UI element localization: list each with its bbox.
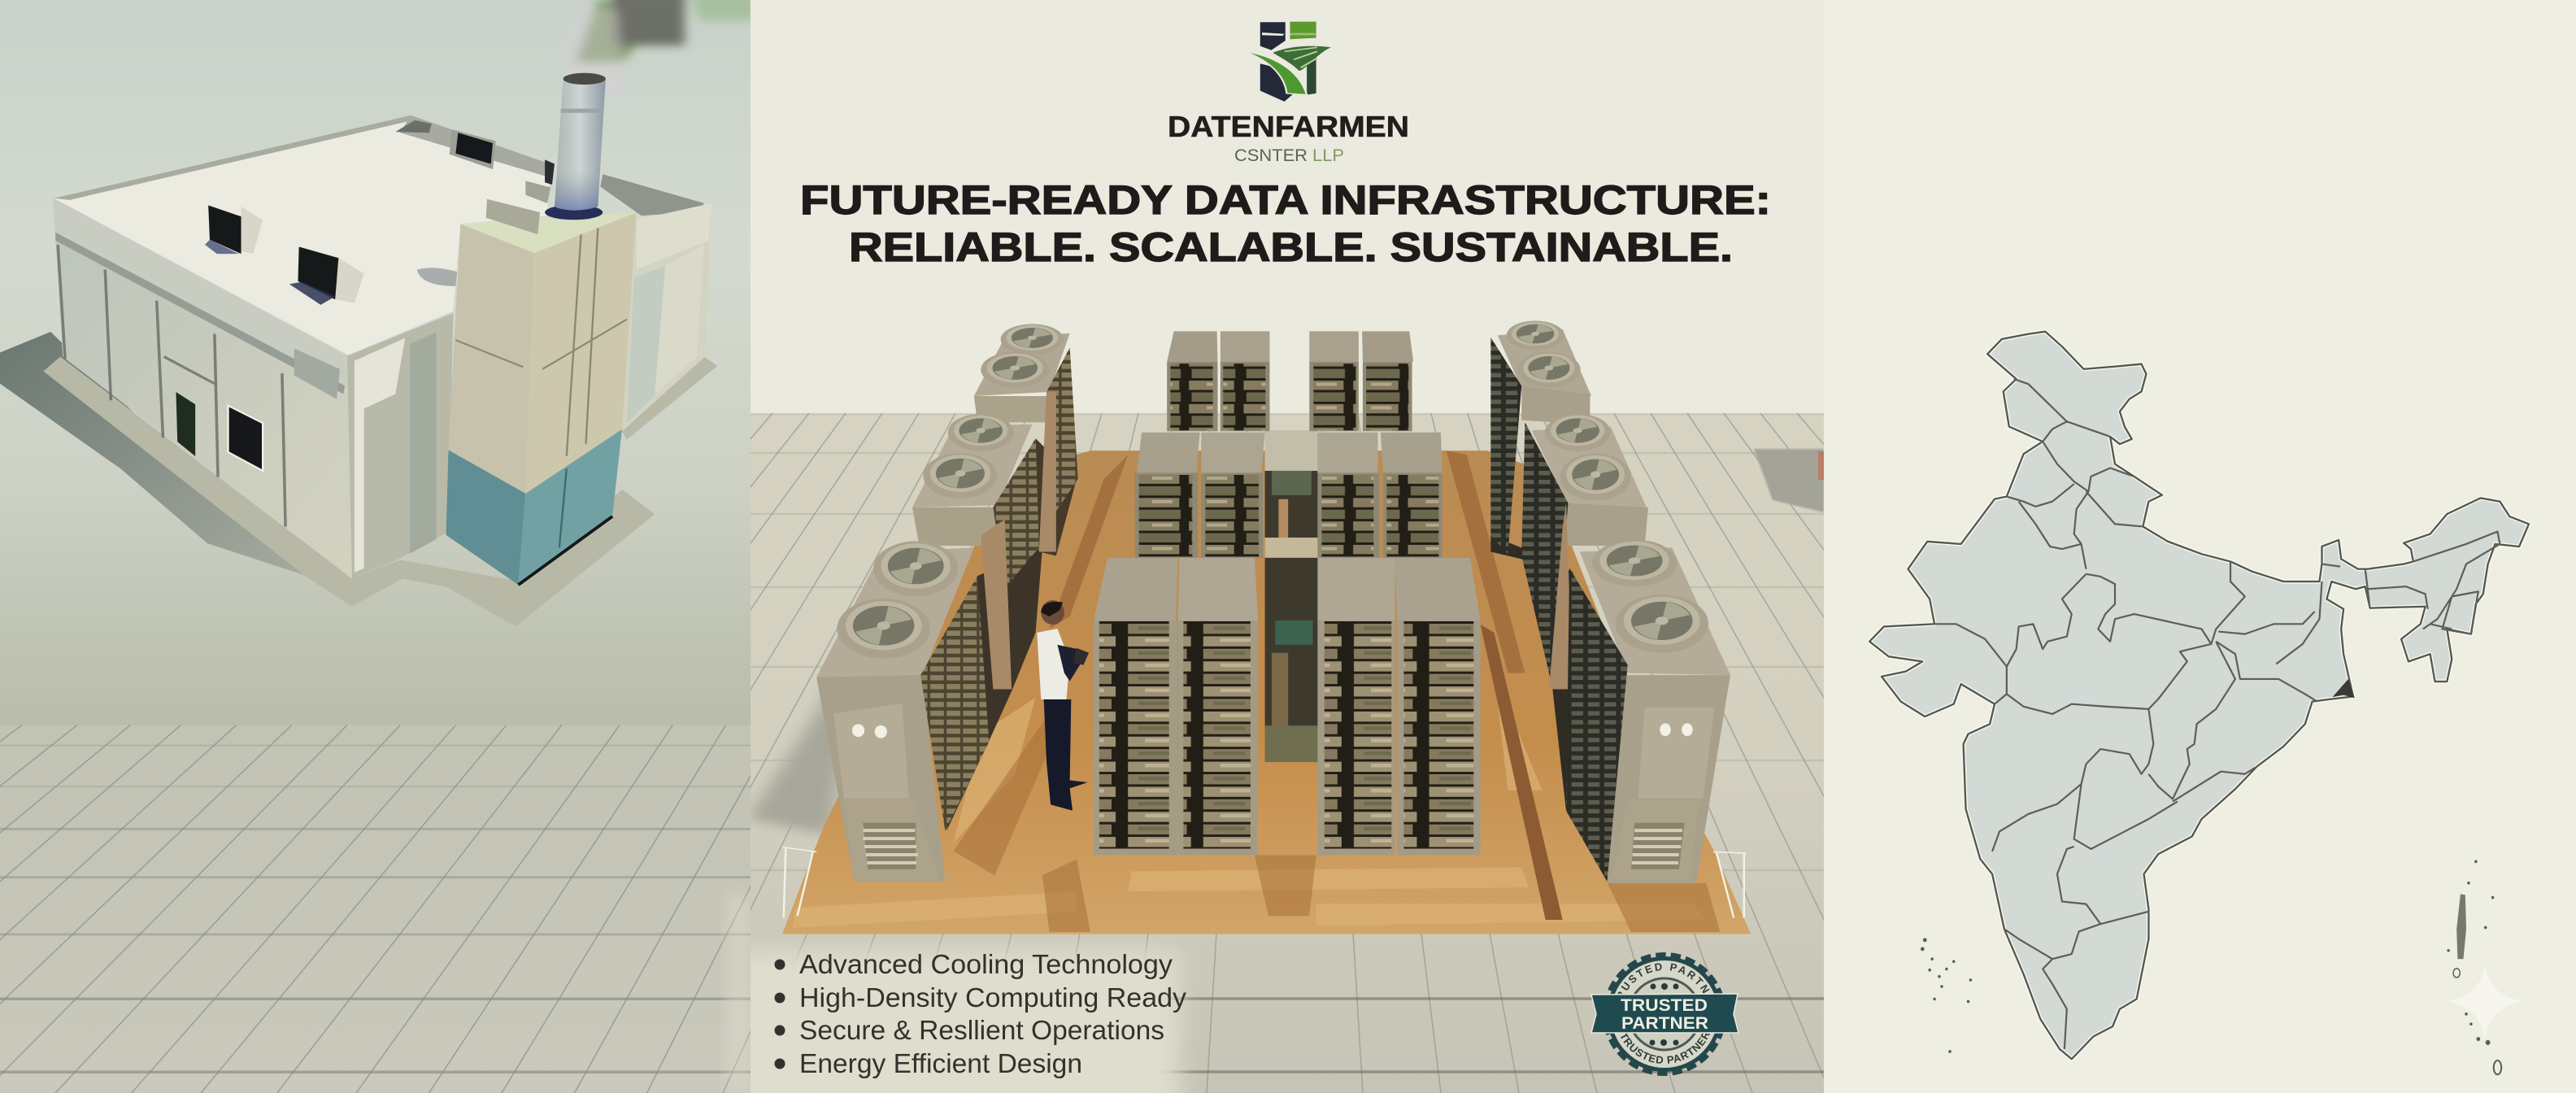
cooling units: right front [1566,540,1730,883]
cooling units: right middle [1521,414,1648,690]
panel: India map [1824,0,2576,1093]
map of India with state borders [1869,332,2529,1074]
Andaman and Nicobar islands [2447,860,2501,1074]
vent on facade [294,348,340,399]
wall: front right facade [347,313,453,578]
building with chimney [0,0,756,626]
Lakshadweep islands [1921,938,1972,1053]
cooling units: left front [816,542,989,882]
wall: right facade [626,215,711,426]
bullet backdrop glow [732,951,1179,1093]
shadow patch on floor [1754,449,1824,512]
tiled floor: left panel [0,725,751,1093]
rooftop unit 1 [205,205,263,254]
chimney [545,73,606,220]
panel: center data farm [751,21,1824,1093]
shadow on floor left [751,693,838,837]
roof [54,115,550,355]
dark gaps between cooling units [946,438,1573,831]
tiled floor: center panel [751,413,1824,1093]
white corner posts [782,847,1746,918]
tower: side faces [446,212,637,585]
cooling units: right back [1490,320,1591,554]
bullet 1: Advanced Cooling Technology [799,949,1173,979]
title line 1: FUTURE-READY DATA INFRASTRUCTURE: [800,177,1771,223]
logo mark [1245,22,1331,102]
cooling units: left middle [912,414,1039,690]
bullet 2: High-Density Computing Ready [799,982,1187,1012]
rooftop unit 2 [289,246,364,305]
ground shadow [0,332,309,577]
bullet 4: Energy Efficient Design [799,1048,1082,1078]
logo wordmark: DATENFARMEN [1168,110,1409,143]
rooftop vents by tower [486,159,555,234]
trusted partner badge [1590,952,1739,1076]
racks: middle row [1135,433,1442,558]
cooling units: left back [974,324,1078,551]
wooden deck [782,451,1751,934]
racks: back row [1167,331,1413,431]
panel: left building scene [0,0,751,1093]
logo subtitle: CSNTER LLP [1234,146,1344,165]
smoke plume [574,0,751,67]
door [176,392,195,456]
sparkle watermark [2446,963,2524,1040]
rooftop unit 3 [450,129,496,169]
concrete base slab [43,357,655,626]
bullet 3: Secure & Resllient Operations [799,1015,1164,1045]
trusted partner badge: TRUSTED [1621,996,1708,1015]
trusted partner badge: TRUSTED PARTNER [1617,963,1709,994]
window [228,406,263,471]
central aisle equipment [1265,430,1318,762]
data farm scene [748,320,1751,934]
wall: left facade [55,241,351,578]
trusted partner badge: PARTNER [1621,1014,1708,1033]
feature list [774,949,1187,1078]
racks: front row [1094,558,1481,855]
title line 2: RELIABLE. SCALABLE. SUSTAINABLE. [849,224,1733,270]
trusted partner badge: TRUSTED PARTNER [1621,1033,1711,1064]
person with tablet [1037,600,1089,811]
